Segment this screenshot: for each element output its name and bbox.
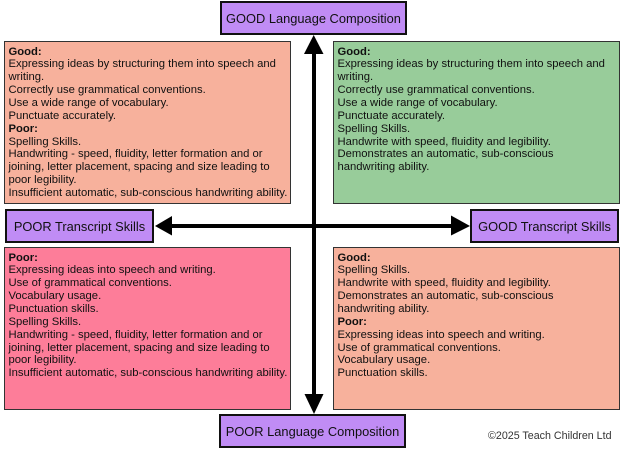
panel: bottom left: Expressing ideas into speech and writing. bbox=[8, 264, 216, 276]
heading: good language composition bbox=[220, 1, 407, 35]
panel: bottom right: Spelling Skills. bbox=[338, 264, 410, 276]
panel: bottom right: Vocabulary usage. bbox=[338, 354, 430, 366]
panel: bottom right: Poor: bbox=[338, 316, 367, 328]
panel: bottom right: Use of grammatical conventions. bbox=[338, 342, 501, 354]
heading: poor language composition: POOR Language Composition bbox=[226, 424, 399, 438]
panel: top right: handwriting ability. bbox=[338, 161, 429, 173]
panel: top left: Correctly use grammatical conventions. bbox=[8, 84, 206, 96]
panel: bottom right: handwriting ability. bbox=[338, 303, 429, 315]
panel: top right: Demonstrates an automatic, sub-conscious bbox=[338, 148, 554, 160]
panel: bottom right: Demonstrates an automatic, sub-conscious bbox=[338, 290, 554, 302]
panel: top left: Handwriting - speed, fluidity, letter formation and or bbox=[8, 148, 263, 160]
panel: bottom left: poor legibility. bbox=[8, 354, 77, 366]
panel: top right bbox=[333, 41, 620, 204]
panel: bottom left: Insufficient automatic, sub-conscious handwriting ability. bbox=[8, 367, 287, 379]
panel: top right: Handwrite with speed, fluidity and legibility. bbox=[338, 136, 551, 148]
panel: top left: Poor: bbox=[8, 123, 38, 135]
panel: top right: Correctly use grammatical conventions. bbox=[338, 84, 535, 96]
panel: top left: Spelling Skills. bbox=[8, 136, 81, 148]
panel: bottom left bbox=[4, 247, 291, 410]
panel: top right: Spelling Skills. bbox=[338, 123, 410, 135]
panel: top left: Expressing ideas by structuring them into speech and bbox=[8, 58, 276, 70]
panel: bottom left: Vocabulary usage. bbox=[8, 290, 101, 302]
heading: poor transcript skills: POOR Transcript Skills bbox=[14, 218, 145, 234]
panel: bottom left: Handwriting - speed, fluidity, letter formation and or bbox=[8, 329, 263, 341]
panel: top right: Expressing ideas by structuring them into speech and bbox=[338, 58, 605, 70]
panel: bottom right: Handwrite with speed, fluidity and legibility. bbox=[338, 277, 551, 289]
panel: bottom left: Punctuation skills. bbox=[8, 303, 99, 315]
heading: good language composition: GOOD Language Composition bbox=[226, 10, 401, 26]
panel: top left: Use a wide range of vocabulary. bbox=[8, 97, 169, 109]
panel: bottom left: Poor: bbox=[8, 252, 38, 264]
panel: bottom left: Use of grammatical conventions. bbox=[8, 277, 172, 289]
panel: top left: Insufficient automatic, sub-conscious handwriting ability. bbox=[8, 187, 287, 199]
panel: bottom right: Punctuation skills. bbox=[338, 367, 428, 379]
panel: top right: Use a wide range of vocabulary. bbox=[338, 97, 498, 109]
panel: bottom left: joining, letter placement, spacing and size leading to bbox=[8, 342, 270, 354]
vertical axis arrow bbox=[304, 35, 324, 414]
panel: bottom right bbox=[333, 247, 620, 410]
panel: top right: writing. bbox=[338, 71, 373, 83]
panel: top left bbox=[4, 41, 291, 204]
panel: top left: joining, letter placement, spacing and size leading to bbox=[8, 161, 270, 173]
panel: bottom left: Spelling Skills. bbox=[8, 316, 81, 328]
heading: good transcript skills bbox=[470, 209, 619, 243]
panel: top left: writing. bbox=[8, 71, 44, 83]
heading: poor transcript skills bbox=[5, 209, 154, 243]
panel: bottom right: Good: bbox=[338, 252, 371, 264]
heading: poor language composition bbox=[219, 414, 406, 448]
panel: top left: poor legibility. bbox=[8, 174, 77, 186]
panel: bottom right: Expressing ideas into speech and writing. bbox=[338, 329, 545, 341]
horizontal axis arrow bbox=[155, 216, 470, 236]
panel: top right: Good: bbox=[338, 46, 371, 58]
panel: top left: Good: bbox=[8, 46, 42, 58]
heading: good transcript skills: GOOD Transcript Skills bbox=[478, 218, 611, 234]
panel: top left: Punctuate accurately. bbox=[8, 110, 116, 122]
panel: top right: Punctuate accurately. bbox=[338, 110, 445, 122]
copyright: ©2025 Teach Children Ltd bbox=[488, 430, 612, 442]
